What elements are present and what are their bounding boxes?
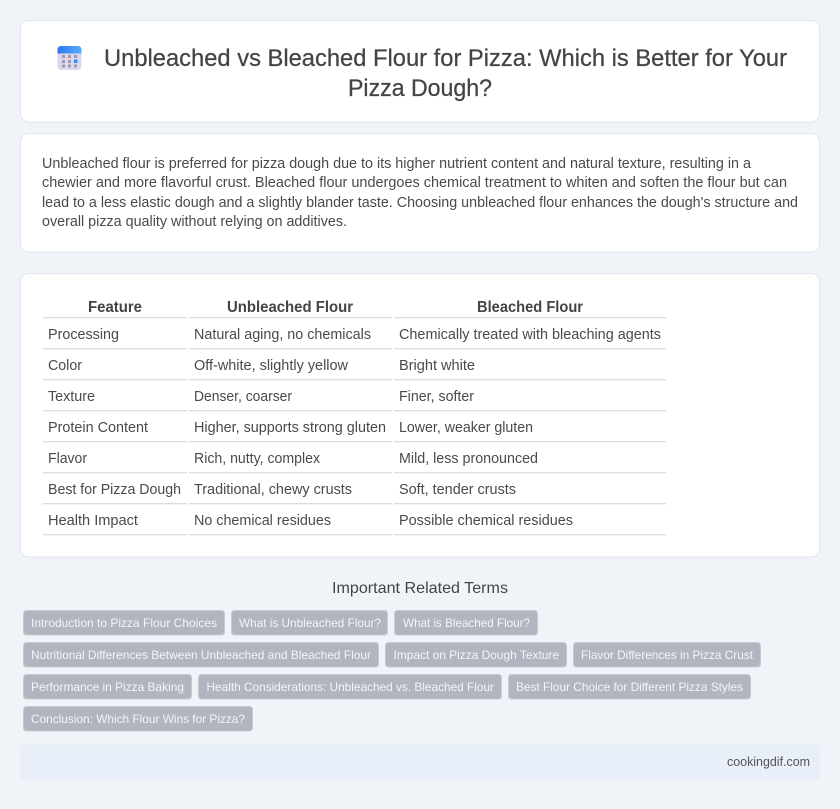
row: color: Color	[48, 358, 82, 374]
tag	[232, 610, 388, 635]
table header row: Unbleached Flour	[227, 299, 353, 316]
row: color: Off-white, slightly yellow	[194, 358, 349, 374]
row: best for pizza dough: Soft, tender crusts	[399, 482, 516, 498]
row: protein content: Lower, weaker gluten	[399, 420, 533, 436]
tag	[24, 610, 224, 635]
row: flavor	[48, 451, 538, 467]
title: Pizza Dough?	[348, 75, 492, 102]
row: processing	[48, 327, 661, 343]
icon: calendar	[58, 46, 82, 70]
panel: summary paragraph	[20, 134, 820, 252]
text block: summary: lead to a less elastic dough and a slightly blander taste. Choosing unbleached flour enhances the dough's structure and	[42, 195, 798, 211]
heading: important related terms: Important Related Terms	[332, 580, 508, 597]
row: texture	[48, 389, 474, 405]
tag	[574, 642, 760, 667]
row: best for pizza dough: Traditional, chewy crusts	[194, 482, 352, 498]
row: flavor: Mild, less pronounced	[399, 451, 538, 467]
tag: What is Bleached Flour?	[403, 616, 530, 630]
row: texture: Denser, coarser	[194, 389, 292, 405]
row: health impact: No chemical residues	[194, 513, 331, 529]
row: color: Bright white	[399, 358, 475, 374]
tag: Introduction to Pizza Flour Choices	[31, 616, 217, 630]
title: Unbleached vs Bleached Flour for Pizza: Which is Better for Your	[104, 45, 787, 72]
row: health impact	[48, 513, 573, 529]
tag: Performance in Pizza Baking	[31, 680, 184, 694]
table header row	[88, 299, 583, 316]
footer	[20, 745, 820, 779]
tag	[394, 610, 538, 635]
panel: header	[20, 20, 820, 122]
title	[104, 45, 787, 102]
tag	[386, 642, 566, 667]
table header row: Feature	[88, 299, 142, 316]
row: health impact: Health Impact	[48, 513, 138, 529]
tag	[24, 706, 252, 731]
row: texture: Texture	[48, 389, 95, 405]
text block: summary: Unbleached flour is preferred for pizza dough due to its higher nutrient content and natural texture, resulting in a	[42, 156, 751, 172]
tag: Impact on Pizza Dough Texture	[394, 648, 559, 662]
row: best for pizza dough: Best for Pizza Dough	[48, 482, 181, 498]
tag	[508, 674, 750, 699]
text block: summary: chewier and more flavorful crust. Bleached flour undergoes chemical treatment to whiten and soften the flour but can	[42, 175, 787, 191]
row: processing: Processing	[48, 327, 119, 343]
table header row: Bleached Flour	[477, 299, 583, 316]
row: flavor: Flavor	[48, 451, 87, 467]
tag: Nutritional Differences Between Unbleached and Bleached Flour	[31, 648, 371, 662]
row: color	[48, 358, 475, 374]
footer: cookingdif.com	[727, 755, 810, 769]
tag	[198, 674, 502, 699]
row: texture: Finer, softer	[399, 389, 474, 405]
tag	[24, 642, 378, 667]
row: processing: Chemically treated with bleaching agents	[399, 327, 661, 343]
row: protein content: Protein Content	[48, 420, 148, 436]
row: protein content: Higher, supports strong gluten	[194, 420, 386, 436]
row: protein content	[48, 420, 533, 436]
tag: What is Unbleached Flour?	[239, 616, 381, 630]
panel: comparison table	[20, 274, 820, 557]
text block: summary: overall pizza quality without relying on additives.	[42, 214, 347, 230]
row: processing: Natural aging, no chemicals	[194, 327, 371, 343]
tag: Conclusion: Which Flour Wins for Pizza?	[31, 712, 245, 726]
tag: Health Considerations: Unbleached vs. Bleached Flour	[206, 680, 494, 694]
tag	[24, 674, 192, 699]
tag: Best Flour Choice for Different Pizza Styles	[516, 680, 743, 694]
tag: Flavor Differences in Pizza Crust	[581, 648, 754, 662]
row: best for pizza dough	[48, 482, 516, 498]
text block: summary	[42, 156, 798, 230]
panel: related term tags	[24, 610, 760, 731]
row: flavor: Rich, nutty, complex	[194, 451, 321, 467]
row: health impact: Possible chemical residues	[399, 513, 573, 529]
